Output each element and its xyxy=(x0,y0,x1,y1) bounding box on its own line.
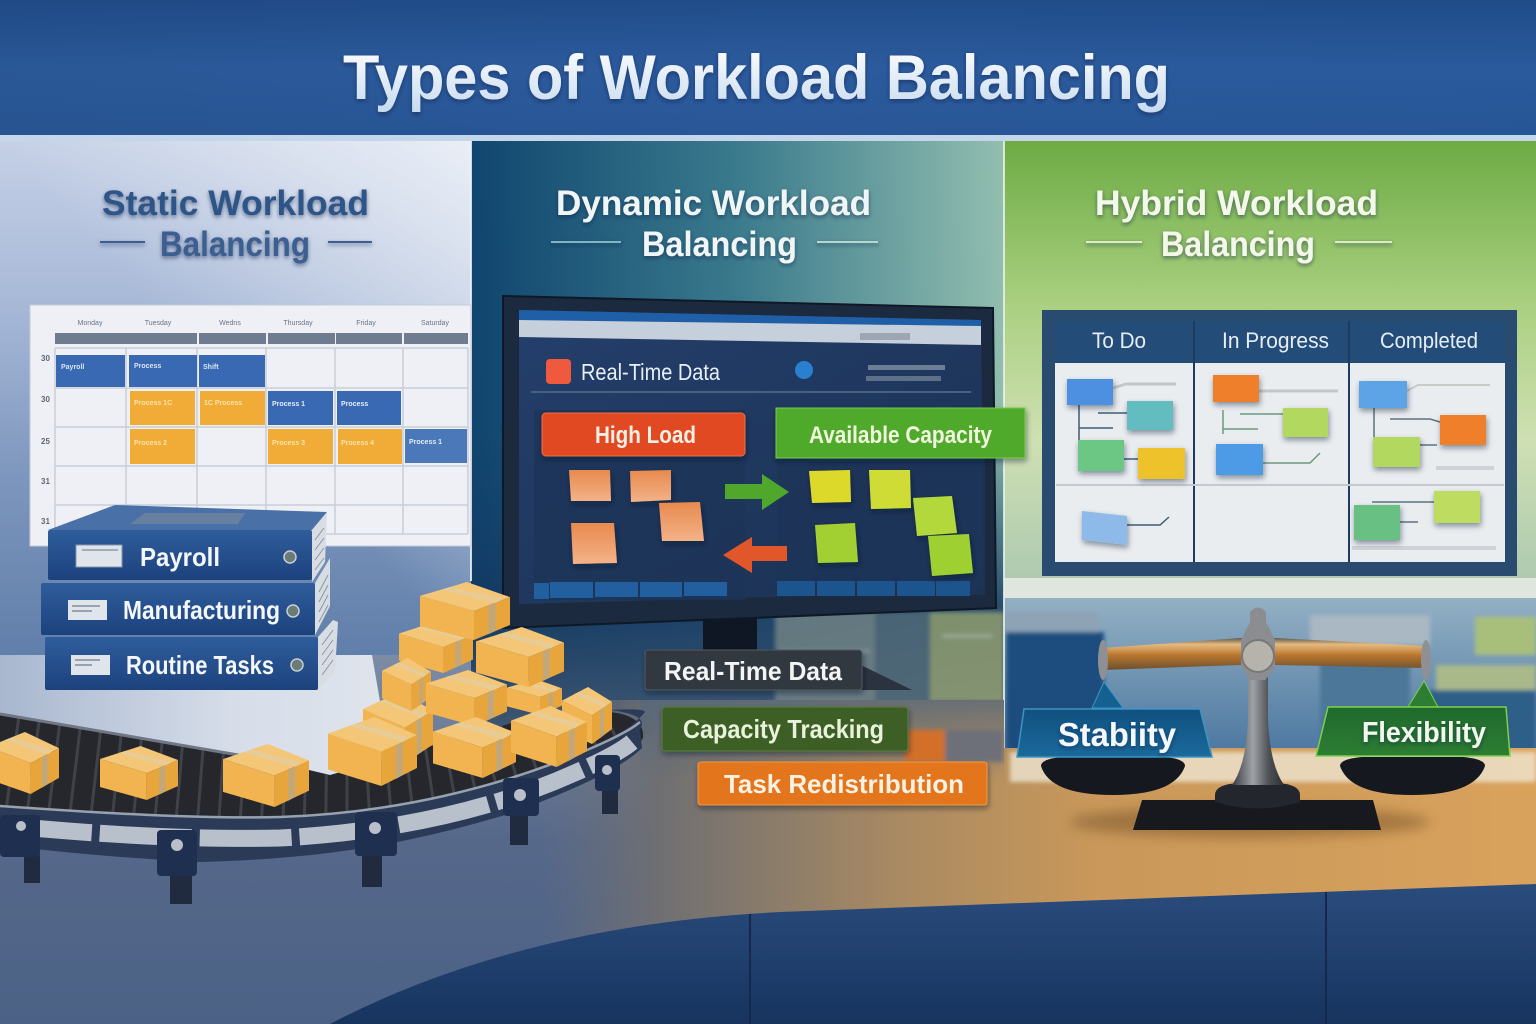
weekly schedule calendar: Friday xyxy=(356,320,376,327)
yellow and green sticky notes xyxy=(809,470,973,576)
header band xyxy=(0,0,1536,141)
left column grid xyxy=(534,410,985,600)
label: capacity tracking: Capacity Tracking xyxy=(683,714,884,744)
heading: hybrid workload balancing xyxy=(1086,184,1392,264)
screen header text: Real-Time Data xyxy=(581,359,720,385)
label: task redistribution: Task Redistribution xyxy=(724,769,964,799)
weekly schedule calendar: 1C Process xyxy=(204,400,242,407)
binder: routine tasks: Routine Tasks xyxy=(126,650,274,680)
high load button: High Load xyxy=(595,422,696,449)
binder: payroll xyxy=(48,505,327,582)
arrow: orange to high load xyxy=(723,537,787,573)
weekly schedule calendar: 30 xyxy=(41,395,50,404)
label: task redistribution xyxy=(698,762,987,805)
weekly schedule calendar: Saturday xyxy=(421,320,450,327)
weekly schedule calendar: Process xyxy=(134,363,161,370)
binder: manufacturing: Manufacturing xyxy=(123,595,280,625)
binder: routine tasks xyxy=(45,620,338,690)
orange sticky notes xyxy=(569,470,704,564)
weekly schedule calendar: 25 xyxy=(41,437,50,446)
desk surface and floor xyxy=(0,655,1536,1024)
weekly schedule calendar: Process 4 xyxy=(341,440,374,447)
center post xyxy=(1232,670,1284,785)
monitor xyxy=(503,296,1025,690)
flexibility tag xyxy=(1316,681,1510,756)
heading: static workload balancing: Static Workload xyxy=(102,184,369,223)
heading: static workload balancing xyxy=(100,184,372,264)
binder stack xyxy=(41,505,338,690)
weekly schedule calendar: Shift xyxy=(203,364,219,371)
screen header status lines xyxy=(531,361,971,393)
weekly schedule calendar: Tuesday xyxy=(145,320,172,327)
base foot xyxy=(1215,783,1300,808)
label: real-time data: Real-Time Data xyxy=(664,656,843,686)
conveyor legs xyxy=(24,790,618,904)
bottom status bars xyxy=(534,581,970,599)
heading: dynamic workload balancing: Balancing xyxy=(642,225,797,264)
conveyor belt xyxy=(0,709,645,904)
flexibility tag: Flexibility xyxy=(1362,717,1486,749)
left pan xyxy=(1041,757,1185,795)
conveyor brackets xyxy=(0,755,620,876)
boxes on conveyor xyxy=(0,732,309,807)
browser title bar xyxy=(519,310,981,345)
title: Types of Workload Balancing xyxy=(343,43,1170,113)
heading: hybrid workload balancing: Balancing xyxy=(1161,225,1315,264)
weekly schedule calendar: 31 xyxy=(41,517,50,526)
belt surface xyxy=(0,712,643,822)
right pan xyxy=(1340,757,1485,795)
weekly schedule calendar: Thursday xyxy=(283,320,313,327)
screen header icon: red square xyxy=(546,359,571,384)
available capacity button: Available Capacity xyxy=(809,422,993,449)
binder: manufacturing xyxy=(41,558,330,635)
beam xyxy=(1103,638,1426,670)
weekly schedule calendar: Process 2 xyxy=(134,440,167,447)
weekly schedule calendar: 31 xyxy=(41,477,50,486)
column title: completed: Completed xyxy=(1380,328,1478,353)
weekly schedule calendar xyxy=(30,305,471,546)
weekly schedule calendar: 30 xyxy=(41,354,50,363)
column title: to do: To Do xyxy=(1092,328,1146,353)
stability tag: Stabiity xyxy=(1058,716,1177,753)
label: capacity tracking xyxy=(662,707,908,751)
arrow: green to available capacity xyxy=(725,474,789,510)
weekly schedule calendar: Process 1C xyxy=(134,400,172,407)
weekly schedule calendar: Process 3 xyxy=(272,440,305,447)
base plinth xyxy=(1133,800,1381,830)
kanban board xyxy=(1042,310,1517,576)
binder: payroll: Payroll xyxy=(140,542,220,572)
weekly schedule calendar: Wedns xyxy=(219,320,241,327)
connector lines xyxy=(1079,384,1496,548)
stability tag xyxy=(1017,682,1212,757)
available capacity button xyxy=(776,408,1025,458)
heading: dynamic workload balancing xyxy=(551,184,878,264)
weekly schedule calendar: Process 1 xyxy=(272,401,305,408)
panel: dynamic workload balancing background xyxy=(471,141,1004,761)
weekly schedule calendar: Process xyxy=(341,401,368,408)
panel: static workload balancing background xyxy=(0,141,471,661)
panel: hybrid workload balancing background xyxy=(1004,141,1536,758)
weekly schedule calendar: Payroll xyxy=(61,364,84,371)
beam end caps xyxy=(1098,640,1431,680)
label: real-time data xyxy=(645,650,862,690)
heading: static workload balancing: Balancing xyxy=(160,225,310,264)
stacked boxes xyxy=(328,582,612,786)
heading: dynamic workload balancing: Dynamic Workload xyxy=(556,184,871,223)
conveyor rail xyxy=(0,709,645,862)
weekly schedule calendar: Process 1 xyxy=(409,439,442,446)
high load button xyxy=(542,413,745,456)
hub xyxy=(1241,608,1275,680)
background storage tray xyxy=(905,730,1003,762)
balance scale xyxy=(1041,608,1485,838)
task cards xyxy=(1067,375,1486,545)
heading: hybrid workload balancing: Hybrid Workload xyxy=(1095,184,1378,223)
weekly schedule calendar: Monday xyxy=(78,320,103,327)
column title: in progress: In Progress xyxy=(1222,328,1329,353)
